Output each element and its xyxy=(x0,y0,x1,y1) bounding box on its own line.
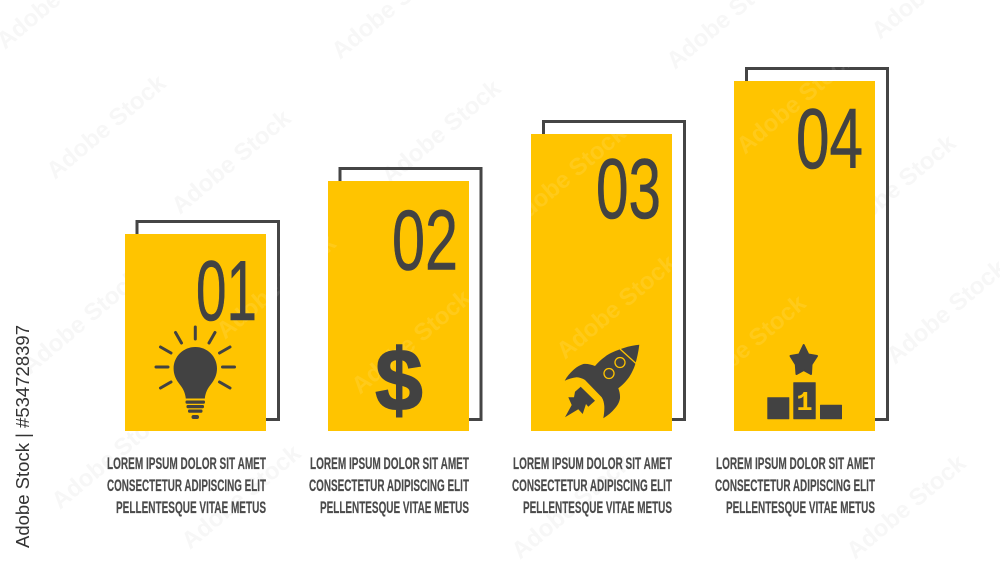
yellow bar 2 xyxy=(328,181,469,431)
caption 4: PELLENTESQUE VITAE METUS xyxy=(726,498,875,517)
watermark on yellow bars: Adobe Stock xyxy=(732,44,862,160)
icon: podium with star xyxy=(767,345,842,419)
watermark on yellow bars: Adobe Stock xyxy=(502,119,632,235)
watermark on white background: Adobe Stock xyxy=(177,439,307,555)
caption 1 xyxy=(107,454,266,517)
yellow bar 3 xyxy=(531,134,672,431)
caption 4: LOREM IPSUM DOLOR SIT AMET xyxy=(716,454,875,473)
stock id label: Adobe Stock | #534728397 xyxy=(13,325,33,548)
watermark on white background: Adobe Stock xyxy=(17,264,147,380)
icon: dollar sign: $ xyxy=(376,332,422,429)
number 01: 01 xyxy=(196,244,257,339)
watermark on white background: Adobe Stock xyxy=(167,104,297,220)
watermark on yellow bars: Adobe Stock xyxy=(682,289,812,405)
icon: rocket xyxy=(565,345,639,418)
number 04: 04 xyxy=(796,92,863,187)
caption 3: PELLENTESQUE VITAE METUS xyxy=(523,498,672,517)
caption 4: CONSECTETUR ADIPISCING ELIT xyxy=(715,476,875,495)
caption 3: CONSECTETUR ADIPISCING ELIT xyxy=(512,476,672,495)
caption 3 xyxy=(512,454,672,517)
watermark on yellow bars xyxy=(212,44,862,405)
number 02: 02 xyxy=(392,194,458,288)
watermark on yellow bars: Adobe Stock xyxy=(552,249,682,365)
caption 1: PELLENTESQUE VITAE METUS xyxy=(116,498,266,517)
number 03: 03 xyxy=(596,142,661,237)
icon: podium with star: 1 xyxy=(796,389,813,419)
watermark on white background: Adobe Stock xyxy=(832,129,962,245)
watermark on yellow bars: Adobe Stock xyxy=(212,229,342,345)
icon: light bulb xyxy=(156,327,234,419)
watermark on white background: Adobe Stock xyxy=(842,449,972,563)
outline frame 3 xyxy=(544,122,684,420)
watermark on white background: Adobe Stock xyxy=(42,69,172,185)
caption 2 xyxy=(309,454,469,517)
outline frame 1 xyxy=(137,222,278,420)
caption 1: LOREM IPSUM DOLOR SIT AMET xyxy=(107,454,266,473)
watermark on white background: Adobe Stock xyxy=(377,74,507,190)
watermark on yellow bars: Adobe Stock xyxy=(347,284,477,400)
caption 3: LOREM IPSUM DOLOR SIT AMET xyxy=(513,454,672,473)
caption 1: CONSECTETUR ADIPISCING ELIT xyxy=(107,476,266,495)
yellow bar 1 xyxy=(125,234,266,431)
outline frame 4 xyxy=(746,68,888,420)
caption 4 xyxy=(715,454,875,517)
watermark on white background: Adobe Stock xyxy=(47,399,177,515)
yellow bar 4 xyxy=(734,81,875,431)
caption 2: CONSECTETUR ADIPISCING ELIT xyxy=(309,476,469,495)
outline frame 2 xyxy=(340,168,481,420)
watermark on white background: Adobe Stock xyxy=(507,449,637,563)
caption 2: PELLENTESQUE VITAE METUS xyxy=(320,498,469,517)
caption 2: LOREM IPSUM DOLOR SIT AMET xyxy=(310,454,469,473)
